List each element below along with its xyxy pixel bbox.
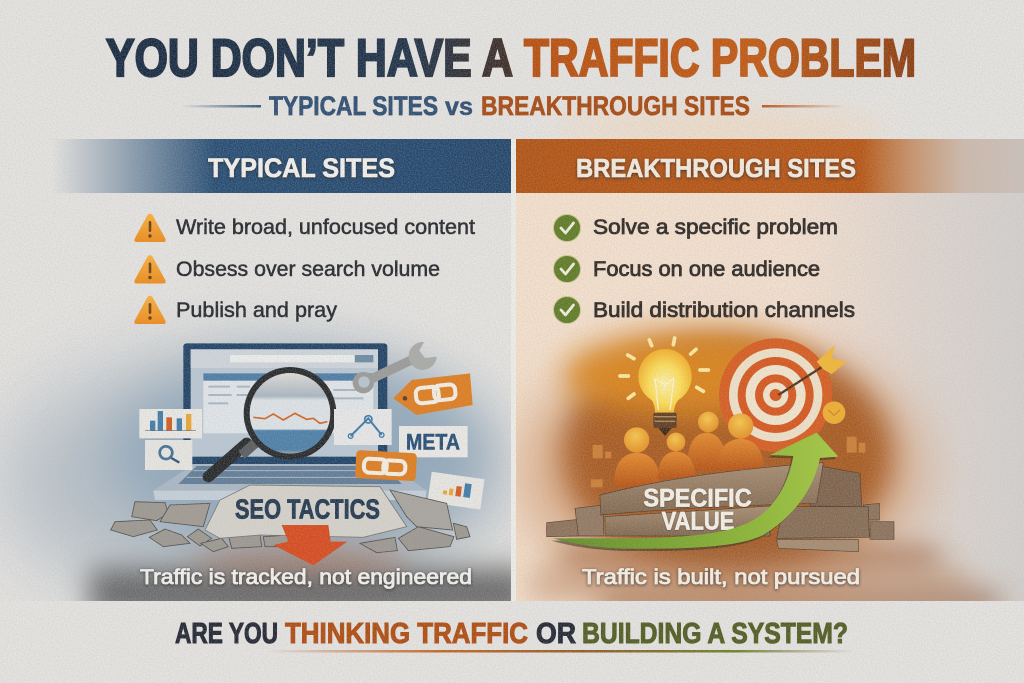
title: TRAFFIC PROBLEM	[524, 29, 916, 88]
list item 1: Solve a specific problem	[593, 216, 838, 239]
list: typical mistakes	[134, 214, 475, 324]
label: specific value: SPECIFIC	[643, 485, 752, 513]
list: breakthrough habits	[554, 214, 855, 324]
list item 2: Obsess over search volume	[176, 258, 440, 281]
stone blocks	[547, 463, 894, 552]
icon: check 1	[554, 214, 580, 242]
caption: breakthrough: Traffic is built, not pursued	[582, 566, 860, 589]
subtitle: TYPICAL SITES	[269, 91, 438, 121]
panel header: breakthrough sites	[516, 139, 1024, 193]
panel header: breakthrough sites: BREAKTHROUGH SITES	[576, 153, 856, 183]
magnifying glass	[208, 370, 333, 477]
light bulb	[620, 338, 708, 436]
list item 3: Publish and pray	[176, 299, 338, 322]
people group	[614, 412, 764, 487]
closing question: BUILDING A SYSTEM?	[582, 618, 848, 650]
subtitle: vs	[445, 93, 473, 121]
closing question	[175, 618, 855, 652]
panel header: typical sites: TYPICAL SITES	[208, 153, 395, 183]
subtitle	[181, 91, 846, 121]
icon: wrench	[353, 342, 437, 393]
rubble	[111, 490, 470, 553]
label: specific value	[643, 485, 752, 535]
illustration: specific value	[547, 338, 894, 552]
card: network	[334, 409, 392, 445]
card: growth chart	[427, 472, 485, 510]
list item 2: Focus on one audience	[593, 258, 820, 281]
caption: typical: Traffic is tracked, not engineered	[140, 566, 472, 589]
closing question: OR	[536, 618, 576, 650]
icon: down arrow	[273, 525, 347, 565]
title: YOU DON’T HAVE A	[106, 29, 513, 88]
target	[719, 338, 847, 452]
laptop	[153, 343, 427, 500]
floating squares	[591, 437, 865, 487]
tag: link	[393, 373, 473, 415]
illustration: seo tactics	[111, 342, 485, 565]
subtitle: BREAKTHROUGH SITES	[481, 91, 750, 121]
label: meta: META	[406, 429, 460, 454]
icon: check 2	[554, 256, 580, 282]
closing question: THINKING TRAFFIC	[285, 618, 528, 650]
icon: warning 1	[134, 214, 166, 242]
closing question: ARE YOU	[175, 618, 278, 650]
stone: seo tactics	[205, 485, 407, 538]
tag: link lower	[355, 450, 417, 481]
icon: warning 2	[134, 255, 166, 284]
title	[106, 29, 916, 88]
divider	[511, 139, 516, 601]
label: specific value: VALUE	[662, 507, 734, 535]
list item 3: Build distribution channels	[593, 299, 855, 322]
icon: green growth arrow	[551, 433, 838, 551]
panel: typical sites	[0, 139, 530, 618]
icon: warning 3	[134, 296, 166, 324]
panel: breakthrough sites	[515, 139, 1024, 610]
panel header: typical sites	[0, 139, 512, 193]
chart cards	[139, 409, 202, 470]
list item 1: Write broad, unfocused content	[176, 216, 475, 239]
icon: check 3	[554, 296, 580, 324]
stone: seo tactics: SEO TACTICS	[235, 493, 380, 524]
